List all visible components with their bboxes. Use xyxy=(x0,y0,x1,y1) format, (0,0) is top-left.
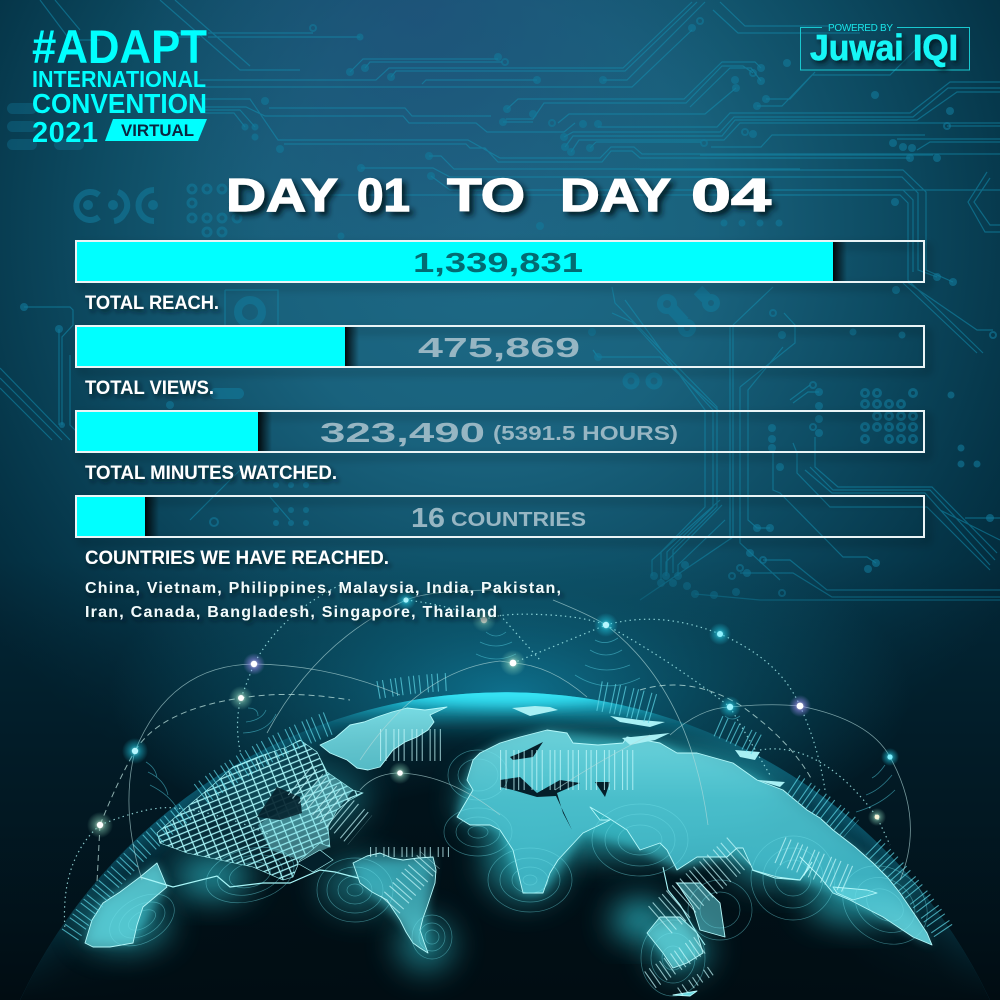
node: blue top xyxy=(396,590,416,610)
bar frame xyxy=(76,326,924,367)
bar frame xyxy=(76,496,924,537)
bar value: 1,339,831 xyxy=(413,247,583,278)
node: blue left xyxy=(122,738,148,764)
background ring shapes xyxy=(76,18,996,596)
title: TO xyxy=(447,169,525,221)
node: lilac xyxy=(243,653,265,675)
panel: total minutes watched bar xyxy=(76,411,924,452)
bar fill shadow xyxy=(833,242,847,281)
network arcs xyxy=(64,585,910,930)
signal wave arcs under nodes xyxy=(146,632,895,812)
land: north america xyxy=(157,740,363,880)
node: lilac right xyxy=(789,695,811,717)
land: australia xyxy=(647,917,703,968)
land: alaska tail xyxy=(85,863,358,947)
map glow patches xyxy=(80,745,905,975)
land: south america xyxy=(353,853,436,953)
network nodes xyxy=(87,590,899,838)
node: cyan right xyxy=(709,623,731,645)
logo line convention: CONVENTION xyxy=(32,88,207,119)
node: beige top xyxy=(472,608,496,632)
title: 01 xyxy=(357,169,410,221)
bar fill shadow xyxy=(145,497,159,536)
land: greenland xyxy=(320,707,447,770)
background circuit board pattern xyxy=(0,0,1000,600)
node: white left xyxy=(87,812,113,838)
node: white atlantic xyxy=(389,762,411,784)
bar value: 323,490 xyxy=(320,417,485,448)
label total minutes: TOTAL MINUTES WATCHED. xyxy=(85,463,337,484)
globe sphere xyxy=(20,692,990,1000)
bar value unit: COUNTRIES xyxy=(451,509,586,531)
bar value hours: (5391.5 HOURS) xyxy=(493,423,678,445)
logo year: 2021 xyxy=(32,117,98,149)
bar fill xyxy=(77,412,258,451)
land: arctic islands xyxy=(512,706,785,787)
radar rings xyxy=(101,750,943,996)
title xyxy=(226,169,772,221)
Juwai IQI wordmark: Juwai IQI xyxy=(810,27,958,68)
label total reach: TOTAL REACH. xyxy=(85,293,219,314)
node: white centre xyxy=(500,650,526,676)
bar fill xyxy=(77,242,833,281)
logo hashtag line: #ADAPT xyxy=(32,20,207,73)
bar frame xyxy=(76,241,924,282)
powered by label: POWERED BY xyxy=(828,23,893,34)
title: DAY xyxy=(560,169,671,221)
panel: total views bar xyxy=(76,326,924,367)
label countries reached: COUNTRIES WE HAVE REACHED. xyxy=(85,548,389,569)
continent halo xyxy=(85,730,932,968)
logo: #ADAPT International Convention 2021 xyxy=(32,20,207,149)
node: cyan mid xyxy=(719,696,741,718)
title: DAY xyxy=(226,169,338,221)
hatch lines around globe rim and land xyxy=(70,682,944,992)
node: green white xyxy=(229,686,253,710)
continents xyxy=(85,706,932,996)
virtual tag: VIRTUAL xyxy=(121,122,194,140)
globe with world map xyxy=(20,585,990,1000)
panel: countries bar xyxy=(76,496,924,537)
land: southeast asia and islands xyxy=(663,862,877,945)
logo line international: INTERNATIONAL xyxy=(32,66,206,92)
land: new zealand xyxy=(673,991,697,996)
node: blue right xyxy=(881,748,899,766)
panel: total reach bar xyxy=(76,241,924,282)
bar frame xyxy=(76,411,924,452)
country list: Iran, Canada, Bangladesh, Singapore, Thailand xyxy=(85,604,497,621)
virtual tag xyxy=(105,119,207,141)
background lower fade xyxy=(0,515,1000,1000)
bar value: 475,869 xyxy=(418,332,580,363)
bar fill xyxy=(77,497,145,536)
label total views: TOTAL VIEWS. xyxy=(85,378,214,399)
node: cyan top xyxy=(594,613,618,637)
land: eurasia and africa xyxy=(457,730,932,945)
node: beige right xyxy=(868,808,886,826)
logo frame xyxy=(800,28,970,70)
title: 04 xyxy=(691,169,772,221)
bar value: 16 xyxy=(411,502,445,533)
logo: powered by Juwai IQI xyxy=(800,23,970,70)
bar fill shadow xyxy=(345,327,359,366)
bar fill shadow xyxy=(258,412,272,451)
country list xyxy=(85,580,561,621)
country list: China, Vietnam, Philippines, Malaysia, India, Pakistan, xyxy=(85,580,561,597)
background circuit pads and rings xyxy=(7,24,994,599)
bar fill xyxy=(77,327,345,366)
